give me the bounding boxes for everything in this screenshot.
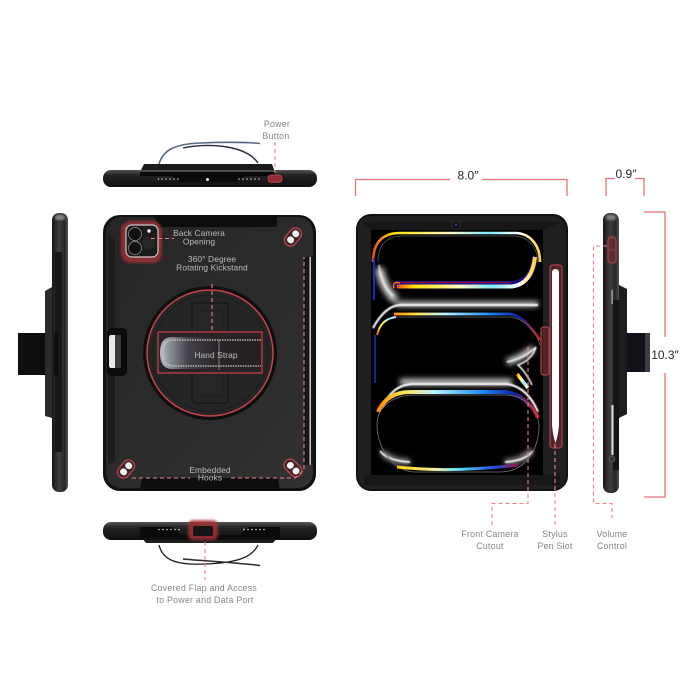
embedded hooks label: Hooks xyxy=(198,472,222,482)
power button highlight xyxy=(268,175,282,182)
hand strap, right side xyxy=(616,333,650,372)
hand strap, left side xyxy=(18,333,57,375)
case body, bottom view xyxy=(103,522,317,540)
hand strap xyxy=(158,332,262,373)
covered flap callout: Covered Flap and Access xyxy=(151,583,257,593)
stylus pen slot callout: Stylus xyxy=(542,529,568,539)
case front frame xyxy=(356,214,568,491)
stylus pen slot callout: Pen Slot xyxy=(537,541,573,551)
back camera label: Opening xyxy=(183,236,215,246)
kickstand label: Rotating Kickstand xyxy=(176,262,248,272)
embedded hooks label: Embedded xyxy=(189,465,231,475)
front view of case xyxy=(356,214,568,491)
kickstand, right side xyxy=(619,285,627,418)
middle wallpaper arc xyxy=(375,314,540,388)
covered flap callout xyxy=(151,542,257,605)
covered flap highlight xyxy=(188,520,218,540)
volume control callout xyxy=(594,246,627,551)
volume control callout: Control xyxy=(597,541,627,551)
top edge view of case xyxy=(103,142,317,187)
volume control callout: Volume xyxy=(597,529,627,539)
screen xyxy=(371,230,543,475)
case body, top view xyxy=(103,170,317,187)
bottom edge view of case xyxy=(103,520,317,566)
case body, right side xyxy=(603,213,619,493)
back camera label: Back Camera xyxy=(173,228,225,238)
left side view of case xyxy=(18,213,68,492)
kickstand platform, top view xyxy=(140,164,275,172)
depth dimension 0.9 inches: 0.9″ xyxy=(616,167,637,181)
front camera cutout callout xyxy=(461,347,528,551)
side handle clip xyxy=(107,328,127,376)
embedded hook, top right xyxy=(282,225,304,249)
embedded hook, bottom left xyxy=(115,457,137,481)
front camera cutout callout: Cutout xyxy=(476,541,504,551)
embedded hook, bottom right xyxy=(282,457,304,479)
back camera label xyxy=(151,228,225,246)
front camera xyxy=(452,221,460,229)
height dimension 10.3 inches xyxy=(644,212,680,497)
case body, left side xyxy=(52,213,68,492)
kickstand label xyxy=(176,254,248,332)
front camera cutout callout: Front Camera xyxy=(461,529,519,539)
hand strap loop, bottom view xyxy=(159,545,260,566)
kickstand platform, bottom view xyxy=(142,538,277,543)
upper wallpaper arc xyxy=(373,233,540,300)
highlight beside screen xyxy=(541,327,549,375)
height dimension 10.3 inches: 10.3″ xyxy=(651,348,680,362)
stylus pen slot callout xyxy=(537,444,573,551)
wallpaper soft glow xyxy=(379,268,538,462)
kickstand label: 360° Degree xyxy=(188,254,236,264)
right side view of case xyxy=(603,213,650,493)
speaker dots, top view xyxy=(158,178,260,181)
embedded hooks label xyxy=(132,257,304,482)
lower wallpaper arc xyxy=(377,392,539,472)
volume control highlight xyxy=(608,237,616,263)
power button callout: Button xyxy=(263,131,289,141)
wallpaper sharp white bands xyxy=(373,265,538,462)
hand strap loop, top view xyxy=(159,142,260,164)
speaker dots, bottom view xyxy=(158,529,265,530)
back view of case xyxy=(103,215,316,491)
power button callout xyxy=(263,119,290,173)
case back panel xyxy=(103,215,316,491)
power button callout: Power xyxy=(264,119,290,129)
covered flap callout: to Power and Data Port xyxy=(157,595,254,605)
stylus pen slot xyxy=(550,265,562,448)
depth dimension 0.9 inches xyxy=(606,167,644,196)
width dimension 8.0 inches: 8.0″ xyxy=(458,168,479,182)
width dimension 8.0 inches xyxy=(356,168,567,196)
rotating kickstand disc xyxy=(143,286,277,420)
kickstand, left side xyxy=(45,287,52,418)
hand strap label: Hand Strap xyxy=(194,350,238,360)
back camera opening xyxy=(121,221,162,263)
